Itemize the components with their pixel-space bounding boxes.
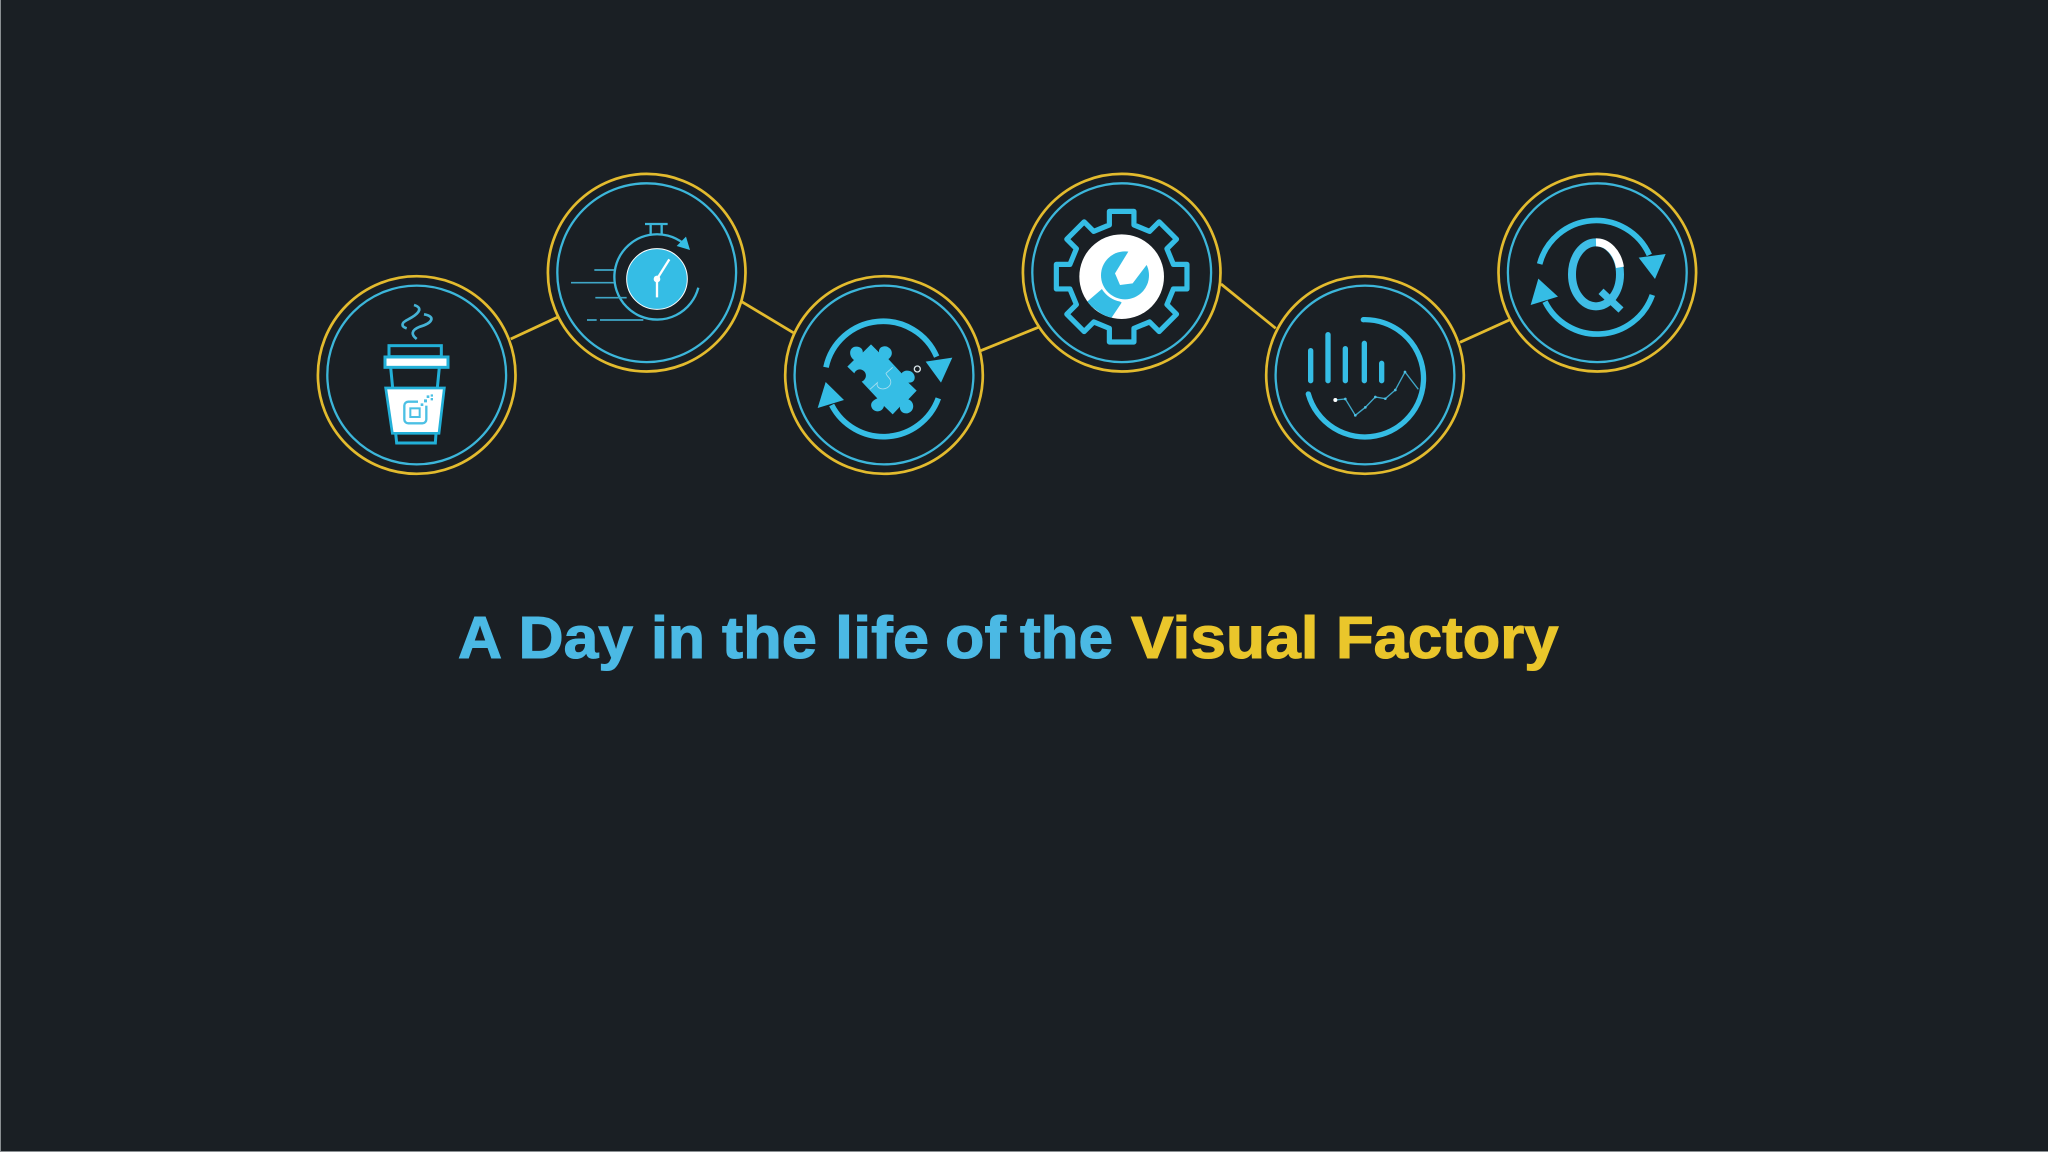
rings: puzzle — [785, 276, 983, 474]
rings: gear — [1023, 174, 1220, 372]
title — [458, 605, 1559, 671]
title: Day — [518, 605, 633, 671]
step 1: coffee cup — [318, 276, 516, 474]
icon: stopwatch — [571, 224, 698, 320]
icon: quality cycle — [1531, 220, 1666, 334]
title: of — [945, 605, 1006, 671]
icon: analytics chart — [1308, 320, 1424, 437]
icon: coffee cup — [385, 305, 448, 443]
title: in — [651, 605, 705, 671]
rings: stopwatch — [548, 174, 746, 372]
timeline connectors — [511, 284, 1509, 351]
title: the — [722, 605, 817, 671]
step 6: quality cycle — [1498, 174, 1696, 372]
rings: quality — [1498, 174, 1696, 372]
title: Factory — [1336, 605, 1559, 671]
step 5: analytics chart — [1266, 276, 1464, 474]
title: the — [1020, 605, 1113, 671]
title: life — [835, 605, 929, 671]
step 2: stopwatch — [548, 174, 746, 372]
step 4: gear and wrench — [1023, 174, 1220, 372]
rings: coffee — [318, 276, 516, 474]
title: Visual — [1131, 605, 1318, 671]
step 3: puzzle cycle — [785, 276, 983, 474]
title: A — [458, 605, 502, 671]
rings: chart — [1266, 276, 1464, 474]
icon: puzzle cycle — [818, 321, 952, 437]
icon: gear and wrench — [1056, 211, 1187, 342]
